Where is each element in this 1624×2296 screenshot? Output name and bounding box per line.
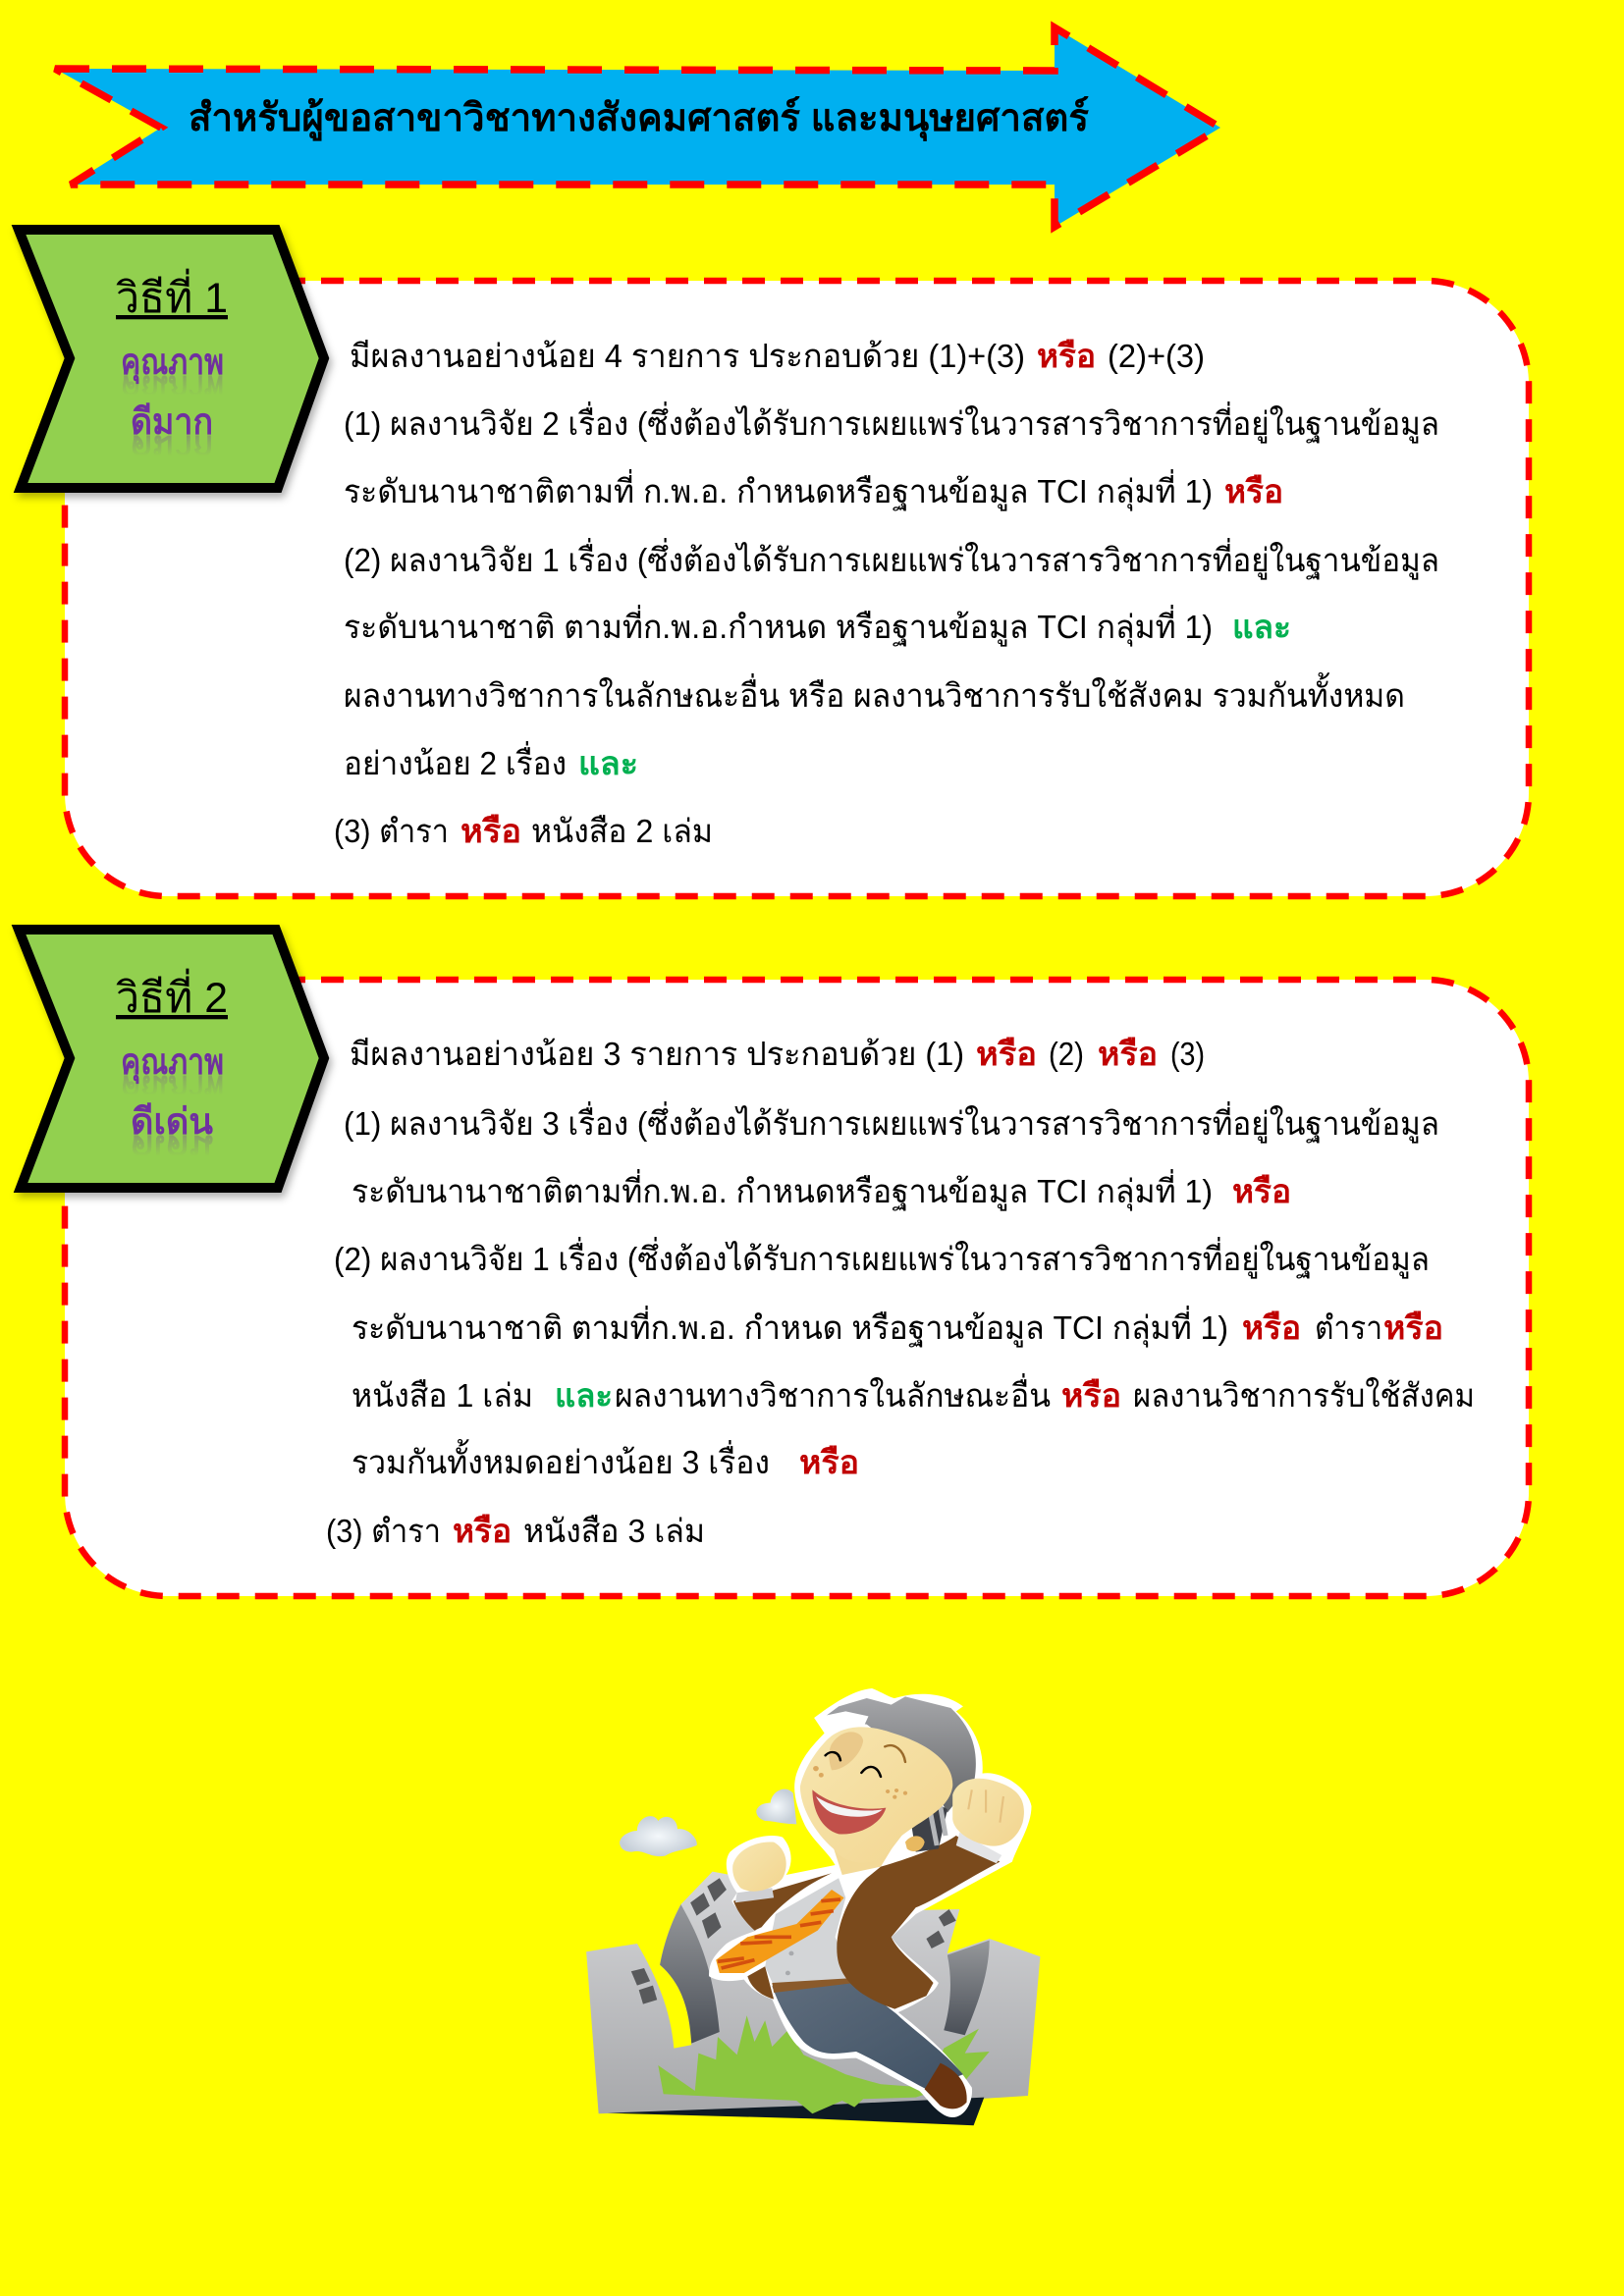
badge label: very good quality: คุณภาพ bbox=[121, 342, 224, 385]
trousers bbox=[772, 1981, 963, 2089]
method 2 text block: หรือ bbox=[976, 1036, 1037, 1072]
method 2 text block: ระดับนานาชาติตามที่ก.พ.อ. กำหนดหรือฐานข้อมูล TCI กลุ่มที่ 1) bbox=[352, 1169, 1213, 1211]
icon: clouds bbox=[620, 1789, 796, 1856]
method 2 text block: (1) ผลงานวิจัย 3 เรื่อง (ซึ่งต้องได้รับการเผยแพร่ในวารสารวิชาการที่อยู่ในฐานข้อมูล bbox=[344, 1101, 1439, 1144]
badge label: excellent quality: ดีเด่น bbox=[131, 1101, 213, 1142]
badge label: excellent quality: คุณภาพ bbox=[121, 1041, 224, 1085]
method 2 text block bbox=[326, 1036, 1475, 1549]
shirt bbox=[765, 1878, 852, 1986]
back hair stripes bbox=[910, 1806, 947, 1852]
method 1 text block: หรือ bbox=[460, 813, 521, 849]
shirt buttons bbox=[785, 1951, 793, 1975]
title arrow banner bbox=[55, 27, 1220, 227]
method 2 text block: หรือ bbox=[799, 1444, 859, 1480]
method 1 text block bbox=[334, 338, 1439, 849]
method 2 text block: ผลงานวิชาการรับใช้สังคม bbox=[1133, 1377, 1475, 1414]
badge label: very good quality: ดีมาก bbox=[131, 401, 213, 442]
method 2 text block: ระดับนานาชาติ ตามที่ก.พ.อ. กำหนด หรือฐานข้อมูล TCI กลุ่มที่ 1) bbox=[352, 1306, 1228, 1348]
method 2 text block: หรือ bbox=[1383, 1309, 1443, 1346]
method 2 text block: (2) ผลงานวิจัย 1 เรื่อง (ซึ่งต้องได้รับการเผยแพร่ในวารสารวิชาการที่อยู่ในฐานข้อมูล bbox=[334, 1237, 1430, 1279]
method 2 text block: หรือ bbox=[453, 1513, 512, 1549]
method 1 text block: ระดับนานาชาติตามที่ ก.พ.อ. กำหนดหรือฐานข้อมูล TCI กลุ่มที่ 1) bbox=[344, 469, 1213, 511]
grass bbox=[658, 2015, 990, 2113]
method 2 text block: ผลงานทางวิชาการในลักษณะอื่น bbox=[615, 1373, 1051, 1414]
method 2 text block: หนังสือ 3 เล่ม bbox=[523, 1513, 705, 1549]
face bbox=[800, 1727, 952, 1862]
method 1 text block: มีผลงานอย่างน้อย 4 รายการ ประกอบด้วย (1)+(3) bbox=[350, 338, 1025, 374]
method 1 text block: ระดับนานาชาติ ตามที่ก.พ.อ.กำหนด หรือฐานข้อมูล TCI กลุ่มที่ 1) bbox=[344, 605, 1213, 647]
panel: method 1 criteria bbox=[65, 281, 1529, 896]
method 1 text block: อย่างน้อย 2 เรื่อง bbox=[344, 741, 567, 781]
badge heading method 1: วิธีที่ 1 bbox=[116, 269, 228, 322]
ground shadow bbox=[608, 2098, 984, 2125]
method 2 text block: หรือ bbox=[1242, 1309, 1301, 1346]
badge label: very good quality bbox=[121, 342, 224, 468]
method 1 text block: และ bbox=[578, 745, 638, 781]
necktie bbox=[716, 1890, 844, 1973]
buildings bbox=[586, 1872, 1040, 2113]
method 2 text block: และ bbox=[555, 1377, 613, 1414]
method 1 text block: (2)+(3) bbox=[1108, 338, 1205, 374]
eyes and brow bbox=[826, 1745, 905, 1777]
method 2 text block: หรือ bbox=[1061, 1377, 1121, 1414]
method 2 text block: หนังสือ 1 เล่ม bbox=[352, 1377, 533, 1414]
white sticker outline bbox=[709, 1688, 1032, 2117]
ear bbox=[905, 1836, 925, 1851]
method 2 text block: (2) bbox=[1049, 1036, 1084, 1072]
badge heading method 2: วิธีที่ 2 bbox=[116, 969, 228, 1022]
badge: method 2 bbox=[19, 930, 324, 1188]
method 2 text block: (3) bbox=[1170, 1036, 1205, 1072]
method 1 text block: ผลงานทางวิชาการในลักษณะอื่น หรือ ผลงานวิชาการรับใช้สังคม รวมกันทั้งหมด bbox=[344, 672, 1405, 714]
method 2 text block: (3) ตำรา bbox=[326, 1513, 441, 1549]
figure: man bbox=[709, 1688, 1032, 2117]
hair bbox=[821, 1696, 976, 1813]
shoe bbox=[925, 2063, 967, 2109]
badge label: excellent quality: คุณภาพ bbox=[121, 1065, 224, 1108]
badge label: very good quality: คุณภาพ bbox=[121, 365, 224, 408]
method 1 text block: (1) ผลงานวิจัย 2 เรื่อง (ซึ่งต้องได้รับการเผยแพร่ในวารสารวิชาการที่อยู่ในฐานข้อมูล bbox=[344, 401, 1439, 444]
banner title text: สำหรับผู้ขอสาขาวิชาทางสังคมศาสตร์ และมนุษยศาสตร์ bbox=[189, 95, 1089, 141]
badge: method 1 bbox=[19, 230, 324, 488]
panel: method 2 criteria bbox=[65, 980, 1529, 1596]
method 1 text block: และ bbox=[1232, 609, 1291, 645]
belt bbox=[772, 1978, 854, 1993]
raised fist and cuff bbox=[952, 1779, 1024, 1863]
badge label: very good quality: ดีมาก bbox=[131, 428, 213, 468]
neck bbox=[832, 1833, 901, 1875]
method 2 text block: รวมกันทั้งหมดอย่างน้อย 3 เรื่อง bbox=[352, 1439, 770, 1480]
method 1 text block: หนังสือ 2 เล่ม bbox=[531, 813, 713, 849]
method 1 text block: หรือ bbox=[1224, 473, 1283, 509]
illustration: happy running man with city background bbox=[586, 1688, 1040, 2125]
method 1 text block: (2) ผลงานวิจัย 1 เรื่อง (ซึ่งต้องได้รับการเผยแพร่ในวารสารวิชาการที่อยู่ในฐานข้อมูล bbox=[344, 538, 1439, 580]
badge label: excellent quality: ดีเด่น bbox=[131, 1128, 213, 1168]
badge label: excellent quality bbox=[121, 1041, 224, 1168]
method 2 text block: ตำรา bbox=[1315, 1309, 1382, 1346]
method 2 text block: มีผลงานอย่างน้อย 3 รายการ ประกอบด้วย (1) bbox=[350, 1036, 964, 1072]
jacket bbox=[733, 1836, 1000, 2009]
method 2 text block: หรือ bbox=[1098, 1036, 1158, 1072]
freckles bbox=[813, 1766, 907, 1799]
mouth bbox=[812, 1789, 886, 1834]
method 2 text block: หรือ bbox=[1232, 1173, 1291, 1209]
lower fist and cuff bbox=[732, 1842, 786, 1902]
method 1 text block: (3) ตำรา bbox=[334, 813, 449, 849]
method 1 text block: หรือ bbox=[1037, 338, 1096, 374]
